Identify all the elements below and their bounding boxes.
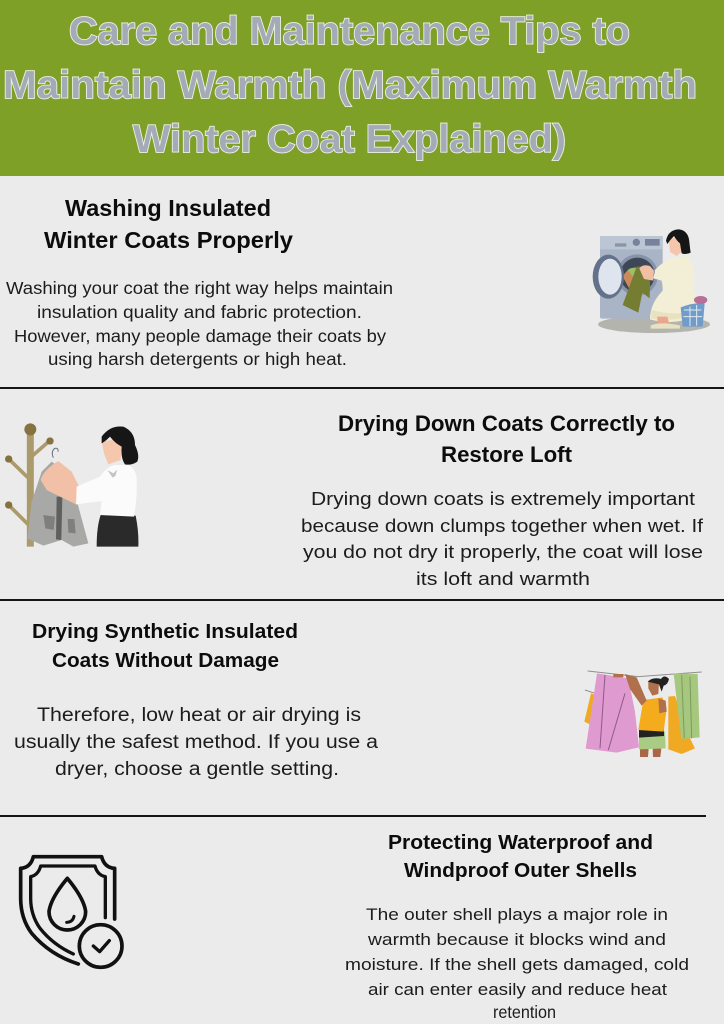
text block: washing: insulation quality and fabric protection.	[37, 302, 362, 322]
heading: washing	[44, 195, 293, 253]
text block: drying synthetic: usually the safest method. If you use a	[14, 732, 378, 753]
icon: woman hanging laundry on a line	[584, 671, 702, 757]
heading: washing: Washing Insulated	[65, 195, 271, 221]
heading: drying synthetic	[32, 621, 298, 672]
text block: washing: Washing your coat the right way helps maintain	[6, 278, 393, 298]
heading: protecting shells: Protecting Waterproof and	[388, 832, 653, 854]
title: Winter Coat Explained)	[133, 118, 566, 161]
divider 2	[0, 599, 724, 601]
icon: woman hanging coat on rack	[5, 423, 138, 547]
heading: protecting shells: Windproof Outer Shells	[404, 860, 637, 882]
panel: drying synthetic coats	[0, 601, 724, 815]
text block: protecting shells: air can enter easily and reduce heat	[368, 981, 667, 999]
text block: drying synthetic: dryer, choose a gentle setting.	[55, 759, 339, 780]
text block: drying down: because down clumps together when wet. If	[301, 515, 704, 536]
text block: drying synthetic: Therefore, low heat or air drying is	[37, 705, 361, 726]
text block: protecting shells: The outer shell plays a major role in	[366, 906, 668, 924]
divider 3	[0, 815, 706, 817]
title	[3, 10, 697, 161]
title: Maintain Warmth (Maximum Warmth	[3, 64, 697, 107]
text block: protecting shells	[345, 906, 689, 1022]
panel: drying down coats	[0, 389, 724, 599]
text block: protecting shells: warmth because it blocks wind and	[367, 931, 666, 949]
text block: drying down	[301, 488, 704, 589]
text block: protecting shells: retention	[493, 1002, 556, 1022]
heading: protecting shells	[388, 832, 653, 882]
text block: drying synthetic	[14, 705, 378, 780]
heading: drying synthetic: Drying Synthetic Insulated	[32, 621, 298, 643]
text block: washing	[6, 278, 393, 369]
text block: washing: using harsh detergents or high heat.	[48, 349, 347, 369]
heading: drying down	[338, 411, 675, 467]
heading: washing: Winter Coats Properly	[44, 227, 293, 253]
text block: drying down: Drying down coats is extremely important	[311, 488, 695, 509]
heading: drying down: Drying Down Coats Correctly to	[338, 411, 675, 436]
panel: protecting outer shells	[0, 817, 724, 1024]
text block: protecting shells: moisture. If the shell gets damaged, cold	[345, 956, 689, 974]
text block: drying down: its loft and warmth	[416, 568, 590, 589]
heading: drying down: Restore Loft	[441, 442, 573, 467]
text block: washing: However, many people damage their coats by	[14, 326, 386, 346]
text block: drying down: you do not dry it properly, the coat will lose	[303, 541, 703, 562]
panel: washing insulated coats	[0, 176, 724, 388]
title banner	[0, 0, 724, 176]
icon: person loading washing machine	[593, 229, 710, 333]
icon: shield with water drop and check mark	[21, 857, 122, 967]
divider 1	[0, 387, 724, 389]
heading: drying synthetic: Coats Without Damage	[52, 650, 279, 672]
title: Care and Maintenance Tips to	[69, 10, 630, 53]
